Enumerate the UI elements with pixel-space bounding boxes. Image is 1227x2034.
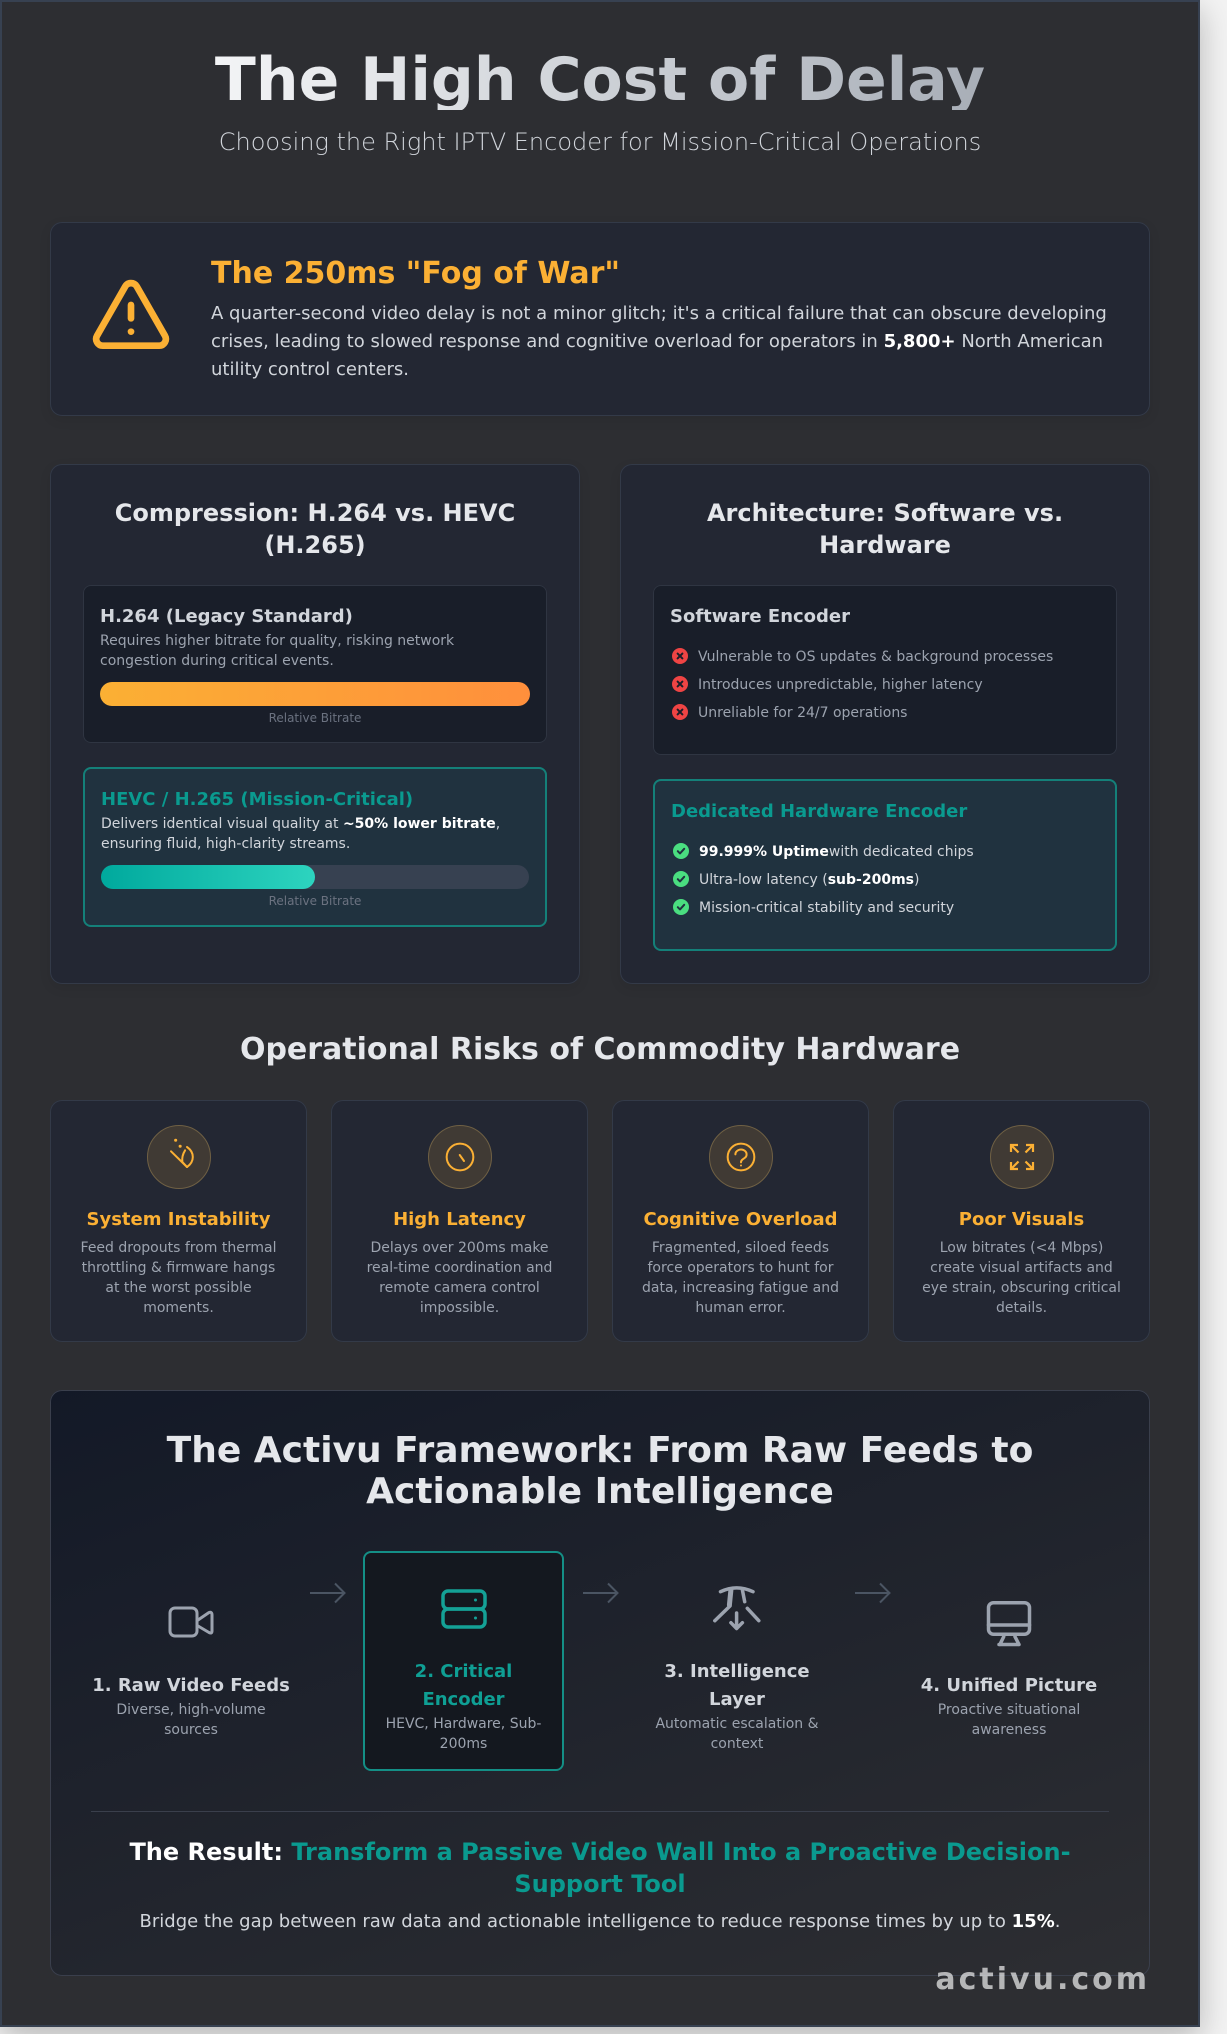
panel: the activu framework: [50, 1390, 1150, 1976]
risk description: Low bitrates (<4 Mbps): [940, 1240, 1103, 1256]
software title: Software Encoder: [670, 606, 850, 627]
HEVC description: ensuring fluid, high-clarity streams.: [101, 836, 350, 852]
arrow: [583, 1582, 619, 1604]
risk title: High Latency: [393, 1209, 526, 1230]
framework heading: Actionable Intelligence: [366, 1471, 834, 1512]
H.264 bitrate bar: [100, 682, 530, 706]
software point 3: Unreliable for 24/7 operations: [698, 705, 907, 721]
architecture heading: [707, 499, 1063, 559]
step title: [664, 1661, 810, 1710]
hardware point 1: 99.999% Uptimewith dedicated chips: [699, 844, 974, 860]
hardware title: Dedicated Hardware Encoder: [671, 801, 967, 822]
alert body: [211, 303, 1107, 380]
step description: 200ms: [440, 1736, 487, 1752]
icon: video camera: [168, 1606, 214, 1638]
subtitle: Choosing the Right IPTV Encoder for Mission-Critical Operations: [219, 128, 981, 156]
icon: check: [673, 899, 689, 915]
risk title: System Instability: [87, 1209, 270, 1230]
software point 2: Introduces unpredictable, higher latency: [698, 677, 983, 693]
step 3: intelligence layer: [655, 1586, 819, 1752]
icon: intelligence: [713, 1586, 761, 1630]
step title: 1. Raw Video Feeds: [92, 1675, 290, 1696]
architecture heading: Hardware: [819, 531, 951, 559]
result heading: The Result: Transform a Passive Video Wall Into a Proactive Decision-: [129, 1838, 1071, 1866]
H.264 description: [100, 633, 454, 669]
step 1: raw video feeds: [92, 1606, 290, 1738]
card: HEVC: [83, 767, 547, 927]
card: dedicated hardware encoder: [653, 779, 1117, 951]
software point 1: Vulnerable to OS updates & background processes: [698, 649, 1053, 665]
icon: server: [441, 1589, 487, 1629]
risk description: Fragmented, siloed feeds: [652, 1240, 829, 1256]
risk description: details.: [996, 1300, 1047, 1316]
step description: [116, 1702, 266, 1738]
H.264 title: H.264 (Legacy Standard): [100, 606, 353, 627]
icon: x: [672, 676, 688, 692]
hardware point 3: Mission-critical stability and security: [699, 900, 954, 916]
title: The High Cost of Delay: [215, 45, 985, 115]
section heading: operational risks: Operational Risks of Commodity Hardware: [240, 1032, 960, 1067]
risk description: impossible.: [420, 1300, 499, 1316]
alert heading: The 250ms "Fog of War": [211, 256, 620, 291]
risk description: Delays over 200ms make: [370, 1240, 549, 1256]
risk description: remote camera control: [379, 1280, 540, 1296]
bar label: Relative Bitrate: [269, 711, 361, 725]
step description: context: [711, 1736, 763, 1752]
compression heading: Compression: H.264 vs. HEVC: [115, 499, 515, 527]
result heading: [129, 1838, 1071, 1898]
step description: HEVC, Hardware, Sub-: [386, 1716, 541, 1732]
step title: 2. Critical: [415, 1661, 512, 1682]
risk description: [642, 1240, 839, 1316]
risk description: [81, 1240, 276, 1316]
step title: [415, 1661, 512, 1710]
icon: x: [672, 648, 688, 664]
H.264 description: congestion during critical events.: [100, 653, 334, 669]
compression heading: [115, 499, 515, 559]
risk description: moments.: [143, 1300, 214, 1316]
risk description: create visual artifacts and: [930, 1260, 1113, 1276]
step description: [938, 1702, 1080, 1738]
card: software encoder: [653, 585, 1117, 755]
arrow: [855, 1582, 891, 1604]
H.264 description: Requires higher bitrate for quality, risking network: [100, 633, 454, 649]
risk description: force operators to hunt for: [648, 1260, 833, 1276]
risk description: [922, 1240, 1121, 1316]
architecture heading: Architecture: Software vs.: [707, 499, 1063, 527]
arrow: [310, 1582, 346, 1604]
risk description: data, increasing fatigue and: [642, 1280, 839, 1296]
step description: Proactive situational: [938, 1702, 1080, 1718]
step 4: unified picture: [921, 1601, 1097, 1738]
brand: activu.com: activu.com: [935, 1962, 1150, 1997]
icon: check: [673, 871, 689, 887]
alert body: utility control centers.: [211, 359, 409, 380]
card: H.264: [83, 585, 547, 743]
HEVC description: Delivers identical visual quality at ~50% lower bitrate,: [101, 816, 500, 832]
icon: expand arrows: [990, 1125, 1054, 1189]
hardware point 2: Ultra-low latency (sub-200ms): [699, 872, 919, 888]
panel: high latency: [331, 1100, 588, 1342]
result heading: Support Tool: [514, 1870, 686, 1898]
step description: awareness: [972, 1722, 1046, 1738]
icon: check: [673, 843, 689, 859]
step description: Automatic escalation &: [655, 1716, 819, 1732]
panel: poor visuals: [893, 1100, 1150, 1342]
risk title: Poor Visuals: [959, 1209, 1084, 1230]
step description: [386, 1716, 541, 1752]
icon: monitor: [986, 1601, 1032, 1646]
HEVC description: [101, 816, 500, 852]
step 2: critical encoder: [363, 1551, 564, 1771]
HEVC title: HEVC / H.265 (Mission-Critical): [101, 789, 413, 810]
step title: 4. Unified Picture: [921, 1675, 1097, 1696]
risk description: Feed dropouts from thermal: [81, 1240, 276, 1256]
panel: fog of war alert: [50, 222, 1150, 416]
panel: compression comparison: [50, 464, 580, 984]
risk description: eye strain, obscuring critical: [922, 1280, 1121, 1296]
panel: cognitive overload: [612, 1100, 869, 1342]
framework heading: The Activu Framework: From Raw Feeds to: [167, 1430, 1033, 1471]
step title: Layer: [709, 1689, 765, 1710]
HEVC bitrate bar: [101, 865, 529, 889]
icon: clock: [428, 1125, 492, 1189]
panel: architecture comparison: [620, 464, 1150, 984]
risk title: Cognitive Overload: [643, 1209, 838, 1230]
risk description: at the worst possible: [105, 1280, 252, 1296]
step description: [655, 1716, 819, 1752]
result body: Bridge the gap between raw data and actionable intelligence to reduce response times by up to 15%.: [140, 1911, 1060, 1932]
step description: Diverse, high-volume: [116, 1702, 266, 1718]
compression heading: (H.265): [264, 531, 366, 559]
risk description: real-time coordination and: [367, 1260, 552, 1276]
icon: question: [708, 1125, 772, 1189]
risk description: [367, 1240, 552, 1316]
risk description: throttling & firmware hangs: [82, 1260, 275, 1276]
bar label: Relative Bitrate: [269, 894, 361, 908]
panel: system instability: [50, 1100, 307, 1342]
icon: instability: [146, 1125, 210, 1189]
alert body: A quarter-second video delay is not a minor glitch; it's a critical failure that can obscure developing: [211, 303, 1107, 324]
framework heading: [166, 1430, 1033, 1512]
icon: warning triangle: [92, 280, 170, 349]
alert body: crises, leading to slowed response and cognitive overload for operators in 5,800+ North American: [211, 331, 1103, 352]
icon: x: [672, 704, 688, 720]
step title: 3. Intelligence: [664, 1661, 810, 1682]
step title: Encoder: [422, 1689, 505, 1710]
risk description: human error.: [695, 1300, 786, 1316]
step description: sources: [164, 1722, 218, 1738]
